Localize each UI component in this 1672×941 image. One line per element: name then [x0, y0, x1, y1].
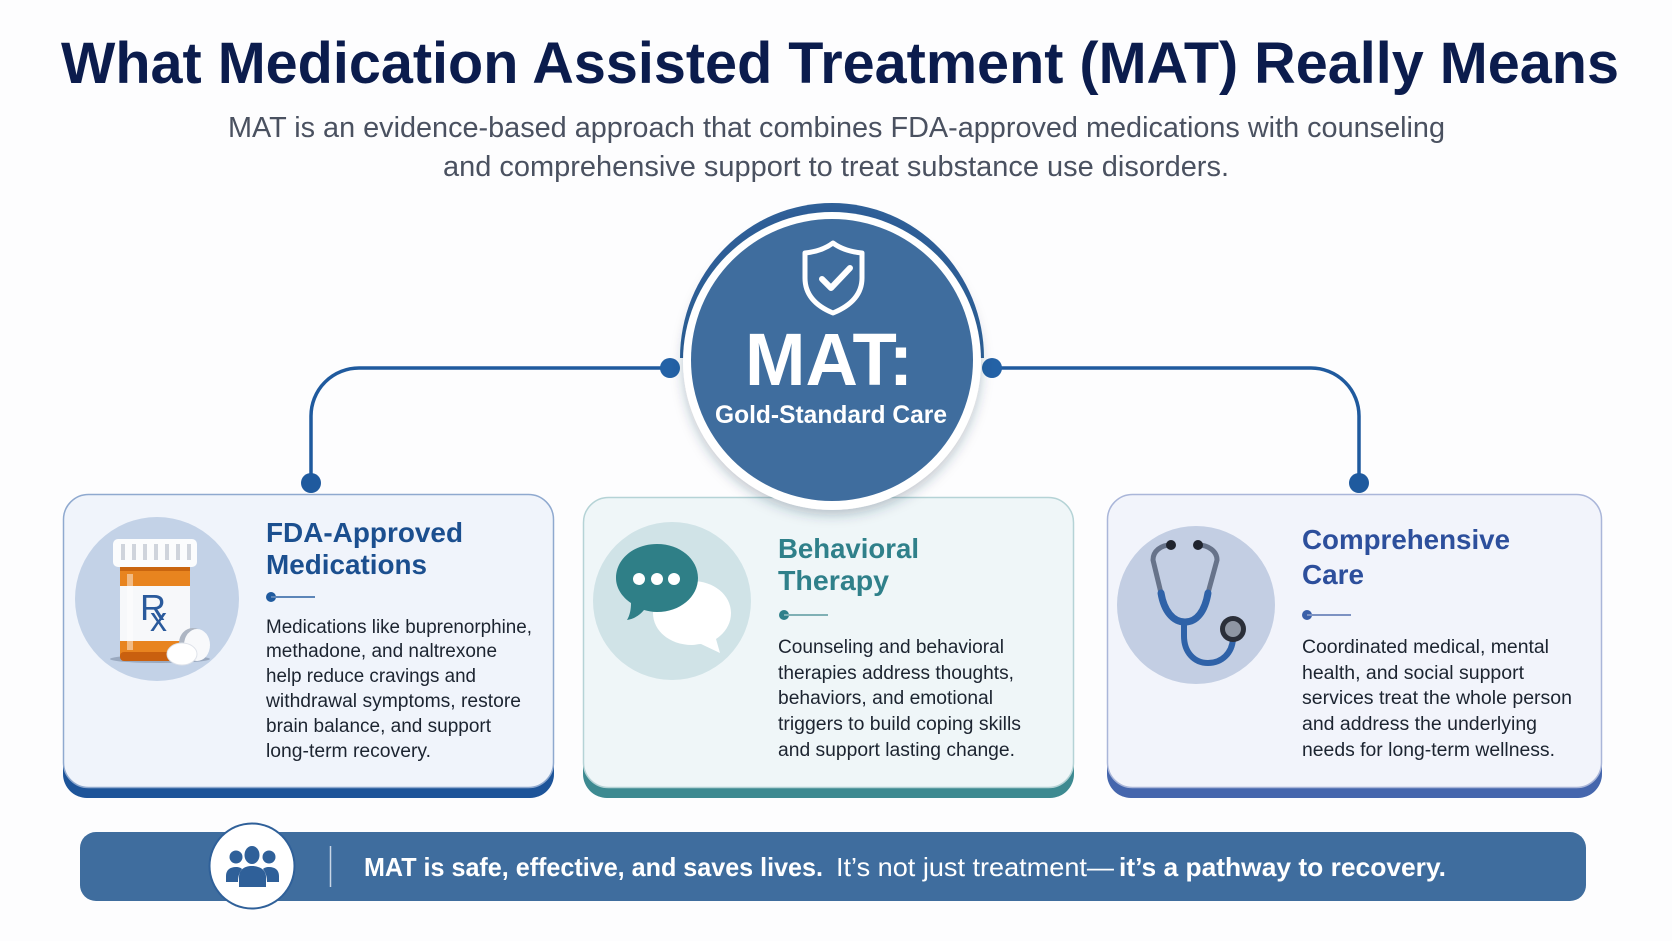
heading	[1302, 524, 1510, 590]
body text: Medications like buprenorphine,	[266, 617, 532, 638]
body text: Coordinated medical, mental	[1302, 637, 1549, 658]
heading: Therapy	[778, 565, 889, 596]
body text: withdrawal symptoms, restore	[265, 691, 521, 712]
icon: people	[208, 822, 296, 910]
body text: health, and social support	[1302, 663, 1525, 684]
divider	[330, 846, 332, 887]
heading: FDA-Approved	[266, 517, 463, 548]
title: What Medication Assisted Treatment (MAT) Really Means	[61, 31, 1619, 96]
body text: Counseling and behavioral	[778, 637, 1004, 658]
heading	[778, 533, 919, 596]
panel: FDA-approved medications	[63, 494, 554, 798]
icon: pill bottle: x	[150, 601, 167, 639]
banner message	[364, 852, 1446, 882]
heading	[266, 517, 463, 580]
heading: Comprehensive	[1302, 524, 1510, 555]
banner message: MAT is safe, effective, and saves lives.	[364, 852, 823, 882]
connector: right	[982, 358, 1369, 493]
panel: behavioral therapy	[583, 498, 1074, 798]
divider marker	[779, 610, 828, 620]
body text: services treat the whole person	[1302, 688, 1572, 709]
badge subheading: Gold-Standard Care	[715, 401, 947, 429]
body text: behaviors, and emotional	[778, 688, 993, 709]
banner message: it’s a pathway to recovery.	[1119, 852, 1446, 882]
icon: stethoscope	[1117, 526, 1275, 684]
body text: needs for long-term wellness.	[1302, 740, 1555, 761]
icon: pill bottle	[75, 517, 239, 681]
badge heading: MAT:	[745, 318, 913, 401]
heading: Medications	[266, 549, 427, 580]
body text: methadone, and naltrexone	[266, 641, 497, 662]
body text: and address the underlying	[1302, 714, 1537, 735]
central badge: MAT gold-standard care	[680, 203, 984, 510]
bottom banner	[80, 822, 1586, 910]
subtitle: and comprehensive support to treat substance use disorders.	[443, 151, 1229, 183]
body text	[1302, 637, 1572, 761]
body text	[265, 617, 532, 762]
connector: left	[301, 358, 680, 493]
heading: Care	[1302, 559, 1364, 590]
body text: brain balance, and support	[266, 716, 492, 737]
icon: shield with check	[805, 243, 862, 313]
banner message: It’s not just treatment—	[836, 852, 1114, 882]
icon: speech bubbles	[593, 522, 751, 680]
body text: long-term recovery.	[266, 741, 431, 762]
heading: Behavioral	[778, 533, 919, 564]
divider marker	[1302, 610, 1351, 620]
body text: help reduce cravings and	[266, 666, 476, 687]
body text	[778, 637, 1021, 761]
icon: pill bottle: R	[140, 587, 166, 628]
body text: therapies address thoughts,	[778, 663, 1014, 684]
body text: and support lasting change.	[778, 740, 1015, 761]
divider marker	[266, 592, 315, 602]
panel: comprehensive care	[1107, 494, 1602, 798]
body text: triggers to build coping skills	[778, 714, 1021, 735]
subtitle: MAT is an evidence-based approach that combines FDA-approved medications with counseling	[228, 112, 1445, 144]
subtitle	[228, 112, 1445, 183]
